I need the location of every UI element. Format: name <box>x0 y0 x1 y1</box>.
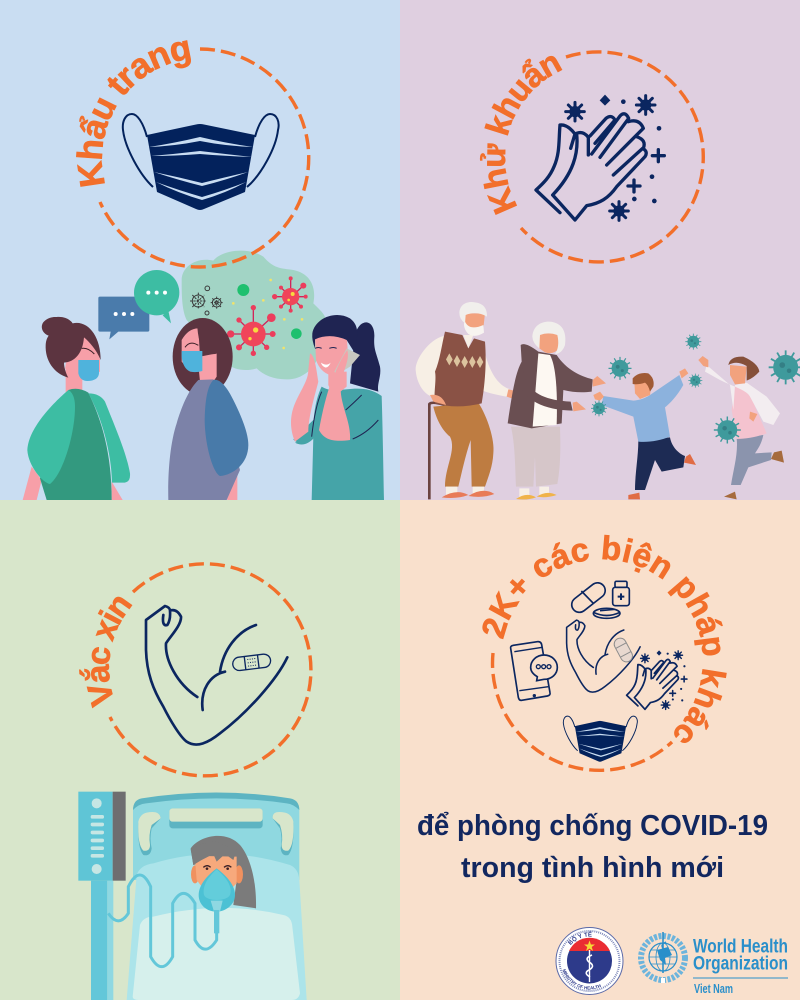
icon: phone with chat bubble <box>511 642 557 700</box>
speech bubble blue <box>98 297 149 339</box>
woman on the phone <box>291 315 384 500</box>
panel: Khẩu trang (mask) <box>0 0 400 500</box>
heading: 2K+ các biện pháp khác: 2K+ các biện pháp khác <box>482 534 727 743</box>
panel: Vắc xin (vaccine) <box>0 500 400 1000</box>
icon: clapping clean hands <box>536 95 664 220</box>
speech bubble green <box>134 270 179 323</box>
IV stand monitor <box>78 792 126 1000</box>
text block: tagline <box>417 810 768 884</box>
logo: World Health Organization emblem <box>641 932 685 983</box>
icon: mask <box>123 114 279 210</box>
panel: 2K+ các biện pháp khác <box>400 500 800 1000</box>
grandmother <box>508 322 606 500</box>
blanket <box>133 908 300 1000</box>
pillow and mattress <box>127 854 307 1000</box>
red virus large <box>227 305 276 356</box>
oxygen tube and mask <box>108 868 235 967</box>
headboard <box>133 792 299 880</box>
panel: Khử khuẩn (disinfect) <box>400 0 800 500</box>
red virus small <box>272 276 308 313</box>
illustration: elderly couple and children with viruses <box>416 302 800 500</box>
circle: dashed ring <box>100 49 309 267</box>
heading: Vắc xin: Vắc xin <box>79 596 132 708</box>
boy <box>593 368 696 499</box>
text block: tagline: trong tình hình mới <box>461 852 724 884</box>
icon: arm with bandage <box>567 620 640 692</box>
heading: Khẩu trang: Khẩu trang <box>76 40 191 187</box>
heading: Khử khuẩn: Khử khuẩn <box>480 56 562 215</box>
icon: clean hands <box>627 650 687 709</box>
icon: pills and bottle <box>569 580 629 618</box>
circle: dashed ring <box>110 564 311 776</box>
logo: Ministry of Health <box>556 927 624 995</box>
logo text: World Health Organization Viet Nam <box>693 936 788 996</box>
text block: tagline: để phòng chống COVID-19 <box>417 810 768 842</box>
icon: flexed arm with bandage <box>146 606 287 745</box>
icon group: all measures <box>511 580 687 762</box>
logo: Ministry of Health: MINISTRY OF HEALTH <box>562 969 602 990</box>
woman middle with mask <box>168 318 248 500</box>
teal viruses <box>591 334 800 443</box>
logo: Ministry of Health: BỘ Y TẾ <box>568 931 592 945</box>
grandfather <box>416 302 523 499</box>
woman left with mask <box>23 317 130 500</box>
icon: mask <box>563 716 637 762</box>
illustration: three women talking with viruses <box>23 251 384 500</box>
patient with oxygen mask <box>191 836 256 908</box>
circle: dashed ring <box>493 653 672 770</box>
illustration: patient on ventilator in hospital bed <box>78 792 307 1000</box>
circle: dashed ring <box>521 52 703 262</box>
girl <box>698 356 784 499</box>
virus cloud <box>182 251 326 379</box>
logo text: World Health Organization Viet Nam: Viet Nam <box>694 981 733 996</box>
